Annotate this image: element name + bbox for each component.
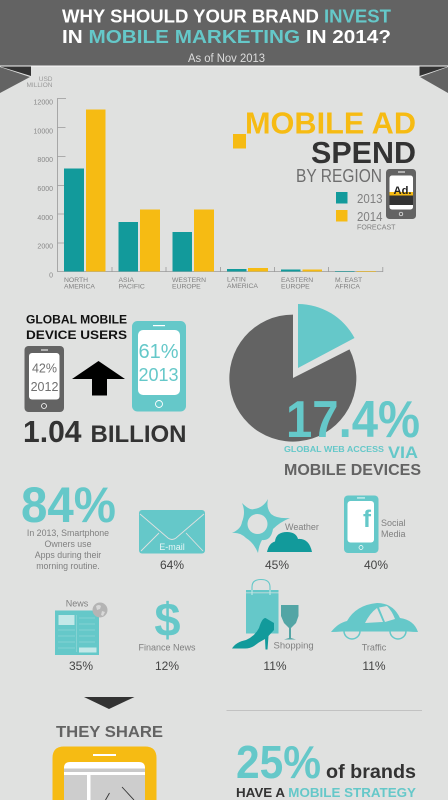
region labels: AMERICA [64, 284, 95, 290]
callout: 84% smartphone owners: Owners use [45, 539, 92, 549]
item: finance news: $ [154, 593, 181, 646]
region labels: WESTERN [172, 277, 206, 284]
item: weather: Weather [285, 522, 319, 532]
item: weather: 45% [265, 558, 289, 572]
item: shopping: Shopping [274, 640, 314, 652]
item: finance news [138, 593, 196, 673]
region labels: LATIN [227, 276, 246, 284]
callout: 17.4%: 17.4% [286, 391, 420, 449]
legend: FORECAST [357, 222, 396, 232]
item: traffic: Traffic [362, 642, 387, 652]
title: WHY SHOULD YOUR BRAND INVEST [62, 6, 392, 26]
icon: 2012 phone: 42% [32, 362, 57, 376]
y axis labels [34, 100, 53, 280]
heading: mobile ad spend: BY REGION [296, 166, 382, 186]
region labels: AMERICA [227, 283, 258, 290]
subtitle date: As of Nov 2013 [188, 53, 265, 65]
icon: 2012 phone [24, 346, 64, 412]
header banner [0, 0, 448, 93]
pie chart: web access share [229, 304, 356, 442]
y axis labels: 6000 [37, 186, 53, 193]
callout: 84% smartphone owners: morning routine. [36, 561, 100, 571]
region labels: ASIA [118, 277, 134, 284]
heading: DEVICE USERS [26, 328, 127, 342]
y axis labels: 10000 [34, 128, 53, 136]
region labels: EUROPE [172, 284, 201, 290]
item: news: News [66, 598, 89, 608]
callout: 17.4%: VIA [388, 443, 418, 462]
legend: 2013 [357, 191, 382, 206]
panel: global mobile device users [23, 312, 186, 449]
callout: 25% of brands: of brands [326, 762, 416, 783]
item: news: 35% [69, 659, 93, 673]
item: shopping: 11% [263, 659, 287, 673]
heading [26, 312, 127, 342]
heading: mobile ad spend: MOBILE AD [245, 106, 416, 140]
callout: 84% smartphone owners: Apps during their [35, 550, 101, 560]
callout: 84% smartphone owners [21, 477, 116, 571]
heading: GLOBAL MOBILE [26, 312, 127, 326]
item: shopping [232, 580, 314, 673]
region labels: M. EAST [335, 277, 362, 284]
heading: mobile ad spend [233, 106, 416, 186]
item: traffic: 11% [362, 659, 386, 673]
icon: 2013 phone [132, 321, 186, 412]
bars 2014 forecast [86, 110, 376, 272]
y axis labels: 2000 [37, 244, 53, 250]
item: finance news: Finance News [138, 642, 196, 652]
heading: mobile ad spend: SPEND [311, 135, 416, 170]
icon: 2013 phone: 61% [138, 341, 179, 363]
region labels: PACIFIC [118, 284, 145, 290]
item: weather [232, 499, 319, 572]
item: traffic [331, 603, 418, 673]
region labels: EASTERN [281, 277, 313, 284]
axis unit label [26, 76, 53, 89]
callout: 25% of brands: HAVE A MOBILE STRATEGY [236, 785, 416, 800]
item: social media: 40% [364, 558, 388, 572]
icon: 2012 phone: 2012 [31, 380, 58, 394]
region labels: EUROPE [281, 284, 310, 290]
legend: 2014 [357, 209, 382, 224]
axis unit label: MILLION [26, 82, 53, 89]
callout: 17.4% [284, 391, 421, 479]
item: social media: Media [381, 529, 406, 539]
arrow down [84, 697, 134, 709]
callout: 84% smartphone owners: 84% [21, 477, 116, 533]
item: social media: f [363, 506, 372, 533]
y axis labels: 12000 [34, 100, 53, 106]
item: email: E-mail [159, 542, 185, 552]
legend [336, 191, 396, 232]
y axis labels: 4000 [37, 215, 53, 222]
callout: 25% of brands: 25% [236, 736, 321, 788]
icon: phone with ad: Ad. [394, 185, 412, 197]
icon: phone with ad [386, 169, 416, 219]
y axis labels: 8000 [37, 157, 53, 164]
region labels: AFRICA [335, 284, 360, 290]
item: email: 64% [160, 558, 184, 572]
axes [58, 98, 383, 272]
callout: 84% smartphone owners: In 2013, Smartphone [27, 528, 109, 538]
callout: 25% of brands [236, 736, 416, 800]
callout: 17.4%: MOBILE DEVICES [284, 462, 421, 479]
heading: they share: THEY SHARE [56, 724, 163, 741]
item: social media: Social [381, 518, 406, 528]
arrow up [72, 361, 125, 396]
item: email [139, 510, 205, 572]
icon: 2013 phone: 2013 [138, 365, 179, 385]
figure: 1.04 billion: 1.04 [23, 414, 82, 449]
title: IN MOBILE MARKETING IN 2014? [62, 26, 391, 47]
title [62, 6, 392, 47]
axis unit label: USD [39, 76, 53, 83]
item: news [55, 598, 108, 673]
item: finance news: 12% [155, 659, 179, 673]
y axis labels: 0 [49, 272, 53, 280]
region labels [64, 276, 362, 290]
item: social media [344, 496, 406, 572]
region labels: NORTH [64, 277, 88, 284]
icon: yellow phone sharing [52, 746, 156, 800]
figure: 1.04 billion [23, 414, 186, 449]
figure: 1.04 billion: BILLION [90, 421, 186, 448]
bars 2013 [64, 168, 354, 272]
bar chart: mobile ad spend by region [26, 76, 383, 290]
callout: 17.4%: GLOBAL WEB ACCESS [284, 444, 384, 454]
